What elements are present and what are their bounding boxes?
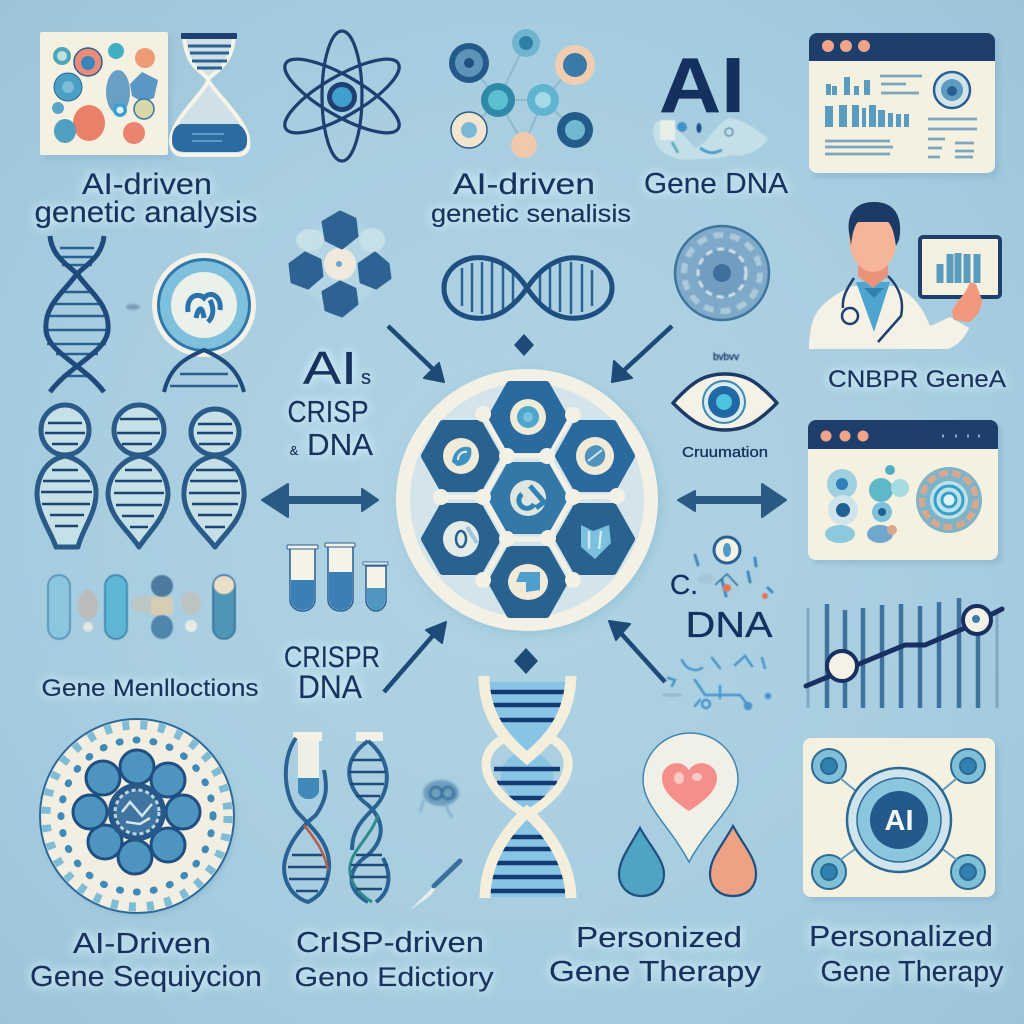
tablet bbox=[920, 237, 1000, 297]
heading: CRISPR DNA: DNA bbox=[298, 669, 363, 705]
heading: AI CRISP DNA: CRISP bbox=[288, 394, 368, 429]
heading: AI-Driven Gene Sequiycion bbox=[30, 928, 262, 993]
icon: peach drop bbox=[710, 826, 756, 896]
label: AI: AI bbox=[884, 805, 914, 837]
outer hub circle bbox=[399, 372, 661, 634]
icon: test tubes bbox=[287, 543, 388, 611]
icon: heart pin bbox=[643, 733, 738, 862]
coat and sleeve bbox=[809, 286, 969, 349]
small blob bbox=[126, 304, 140, 310]
panel: doctor with tablet bbox=[809, 202, 1000, 349]
icon: big DNA bbox=[484, 676, 571, 898]
arrow: upper left bbox=[388, 326, 444, 382]
panel: analysis window bbox=[808, 420, 1002, 564]
label: Gene Menlloctions: Gene Menlloctions bbox=[42, 675, 258, 702]
heading: AI-Driven Gene Sequiycion: AI-Driven bbox=[73, 928, 211, 960]
label: C.: C. bbox=[670, 569, 698, 600]
hexagon: bottom bbox=[492, 550, 564, 614]
panel: dashboard window bbox=[809, 33, 999, 178]
icon: atom bbox=[276, 31, 408, 161]
icon: blue drop bbox=[619, 828, 664, 896]
icon: infinity DNA bbox=[444, 258, 612, 318]
scattered strands bbox=[668, 656, 770, 709]
heading: AI-driven genetic analysis: genetic analysis bbox=[34, 196, 258, 229]
heading: AI CRISP DNA: s bbox=[361, 367, 371, 389]
hexagon: upper left bbox=[425, 424, 497, 488]
big AI letters: AI bbox=[659, 41, 745, 129]
icon: capsule row bbox=[48, 575, 235, 639]
arrow: lower left bbox=[384, 622, 446, 692]
window header bbox=[809, 33, 995, 61]
bar charts bbox=[825, 77, 909, 127]
arrow: right double bbox=[678, 484, 786, 517]
label: DNA: DNA bbox=[686, 604, 772, 645]
strand loop bbox=[486, 738, 568, 815]
card: coloured cells bbox=[40, 32, 172, 160]
heading: AI-Driven Gene Sequiycion: Gene Sequiycion bbox=[30, 961, 262, 993]
icon: test tube with DNA pair bbox=[284, 732, 388, 902]
arrow: upper right bbox=[612, 326, 672, 382]
heading: Personized Gene Therapy: Gene Therapy bbox=[549, 956, 762, 988]
label: Cruumation: Cruumation bbox=[682, 444, 768, 461]
icon: circular specimen bbox=[152, 253, 256, 392]
heading: AI-driven genetic senalisis: genetic senalisis bbox=[431, 200, 631, 228]
heading: Personalized Gene Therapy bbox=[809, 921, 1004, 988]
panel: C DNA network bbox=[662, 537, 772, 709]
heading: AI CRISP DNA: & bbox=[290, 443, 299, 458]
icon: scalpel bbox=[410, 861, 460, 910]
heading: AI-driven genetic senalisis: AI-driven bbox=[453, 168, 595, 201]
heading: CrISP-driven Geno Edictiory: Geno Edictiory bbox=[294, 962, 494, 992]
heading: Personalized Gene Therapy: Personalized bbox=[809, 921, 993, 953]
icon: hexagon cluster bbox=[290, 212, 390, 316]
hexagon: lower right bbox=[559, 507, 631, 571]
light rung fill bbox=[486, 682, 570, 897]
icon: DNA helix left bbox=[46, 236, 108, 392]
circle gauge bbox=[934, 72, 970, 108]
icon: hourglass DNA bbox=[171, 33, 248, 155]
heading: Personalized Gene Therapy: Gene Therapy bbox=[820, 956, 1004, 988]
connectors bbox=[441, 414, 617, 580]
heading: AI-driven genetic senalisis bbox=[431, 168, 631, 228]
faded artwork under AI bbox=[653, 118, 768, 160]
panel: AI core card bbox=[803, 738, 999, 901]
hexagon: centre bbox=[492, 466, 564, 530]
label: CNBPR GeneA: CNBPR GeneA bbox=[828, 366, 1006, 393]
icon: sequencing disc bbox=[40, 719, 237, 917]
panel: central hexagon hub bbox=[396, 369, 661, 634]
heading: Personized Gene Therapy: Personized bbox=[576, 922, 742, 954]
arrow: lower right bbox=[609, 621, 665, 682]
hexagon: upper right bbox=[559, 424, 631, 488]
heading: CrISP-driven Geno Edictiory bbox=[294, 927, 494, 992]
cell cluster bbox=[825, 465, 909, 543]
heading: Personized Gene Therapy bbox=[549, 922, 762, 988]
heading: AI-driven genetic analysis bbox=[34, 168, 258, 229]
icon: node network bbox=[449, 29, 595, 158]
heading: CRISPR DNA: CRISPR bbox=[284, 641, 380, 674]
arrow: left double bbox=[262, 484, 378, 517]
small blurred icon bbox=[420, 780, 459, 818]
strand lower bbox=[485, 812, 571, 898]
hair bbox=[849, 202, 900, 246]
heading: CRISPR DNA bbox=[284, 641, 380, 705]
icon: three DNA strands bbox=[37, 405, 244, 547]
panel: genetic analysis card and hourglass bbox=[40, 32, 248, 160]
heading: AI-driven genetic analysis: AI-driven bbox=[82, 168, 212, 201]
stethoscope bbox=[843, 276, 902, 342]
heading: AI CRISP DNA: AI bbox=[303, 342, 357, 394]
hexagon: lower left bbox=[425, 507, 497, 571]
heading: AI CRISP DNA: DNA bbox=[307, 427, 373, 462]
concentric disc bbox=[916, 467, 982, 533]
heading: CrISP-driven Geno Edictiory: CrISP-driven bbox=[296, 927, 484, 959]
chart: line over vertical bars bbox=[806, 598, 1002, 708]
panel: AI Gene DNA bbox=[644, 41, 789, 200]
neck and head bbox=[858, 258, 888, 288]
hexagon: top bbox=[492, 385, 564, 449]
icon: diamond top bbox=[514, 334, 534, 356]
text lines bbox=[825, 76, 977, 157]
central AI dial bbox=[847, 768, 951, 872]
icon: textured sphere bbox=[675, 226, 769, 320]
hand bbox=[952, 282, 982, 322]
corner nodes bbox=[812, 749, 985, 889]
icon: diamond bottom bbox=[514, 648, 538, 674]
heading: AI CRISP DNA bbox=[288, 342, 373, 462]
junction dots bbox=[433, 406, 625, 588]
strand upper V bbox=[484, 676, 571, 758]
window header bbox=[808, 420, 998, 449]
label: Gene DNA: Gene DNA bbox=[644, 168, 789, 200]
tiny label above eye: bvbvv bbox=[713, 352, 739, 363]
icon: eye bbox=[673, 374, 777, 430]
